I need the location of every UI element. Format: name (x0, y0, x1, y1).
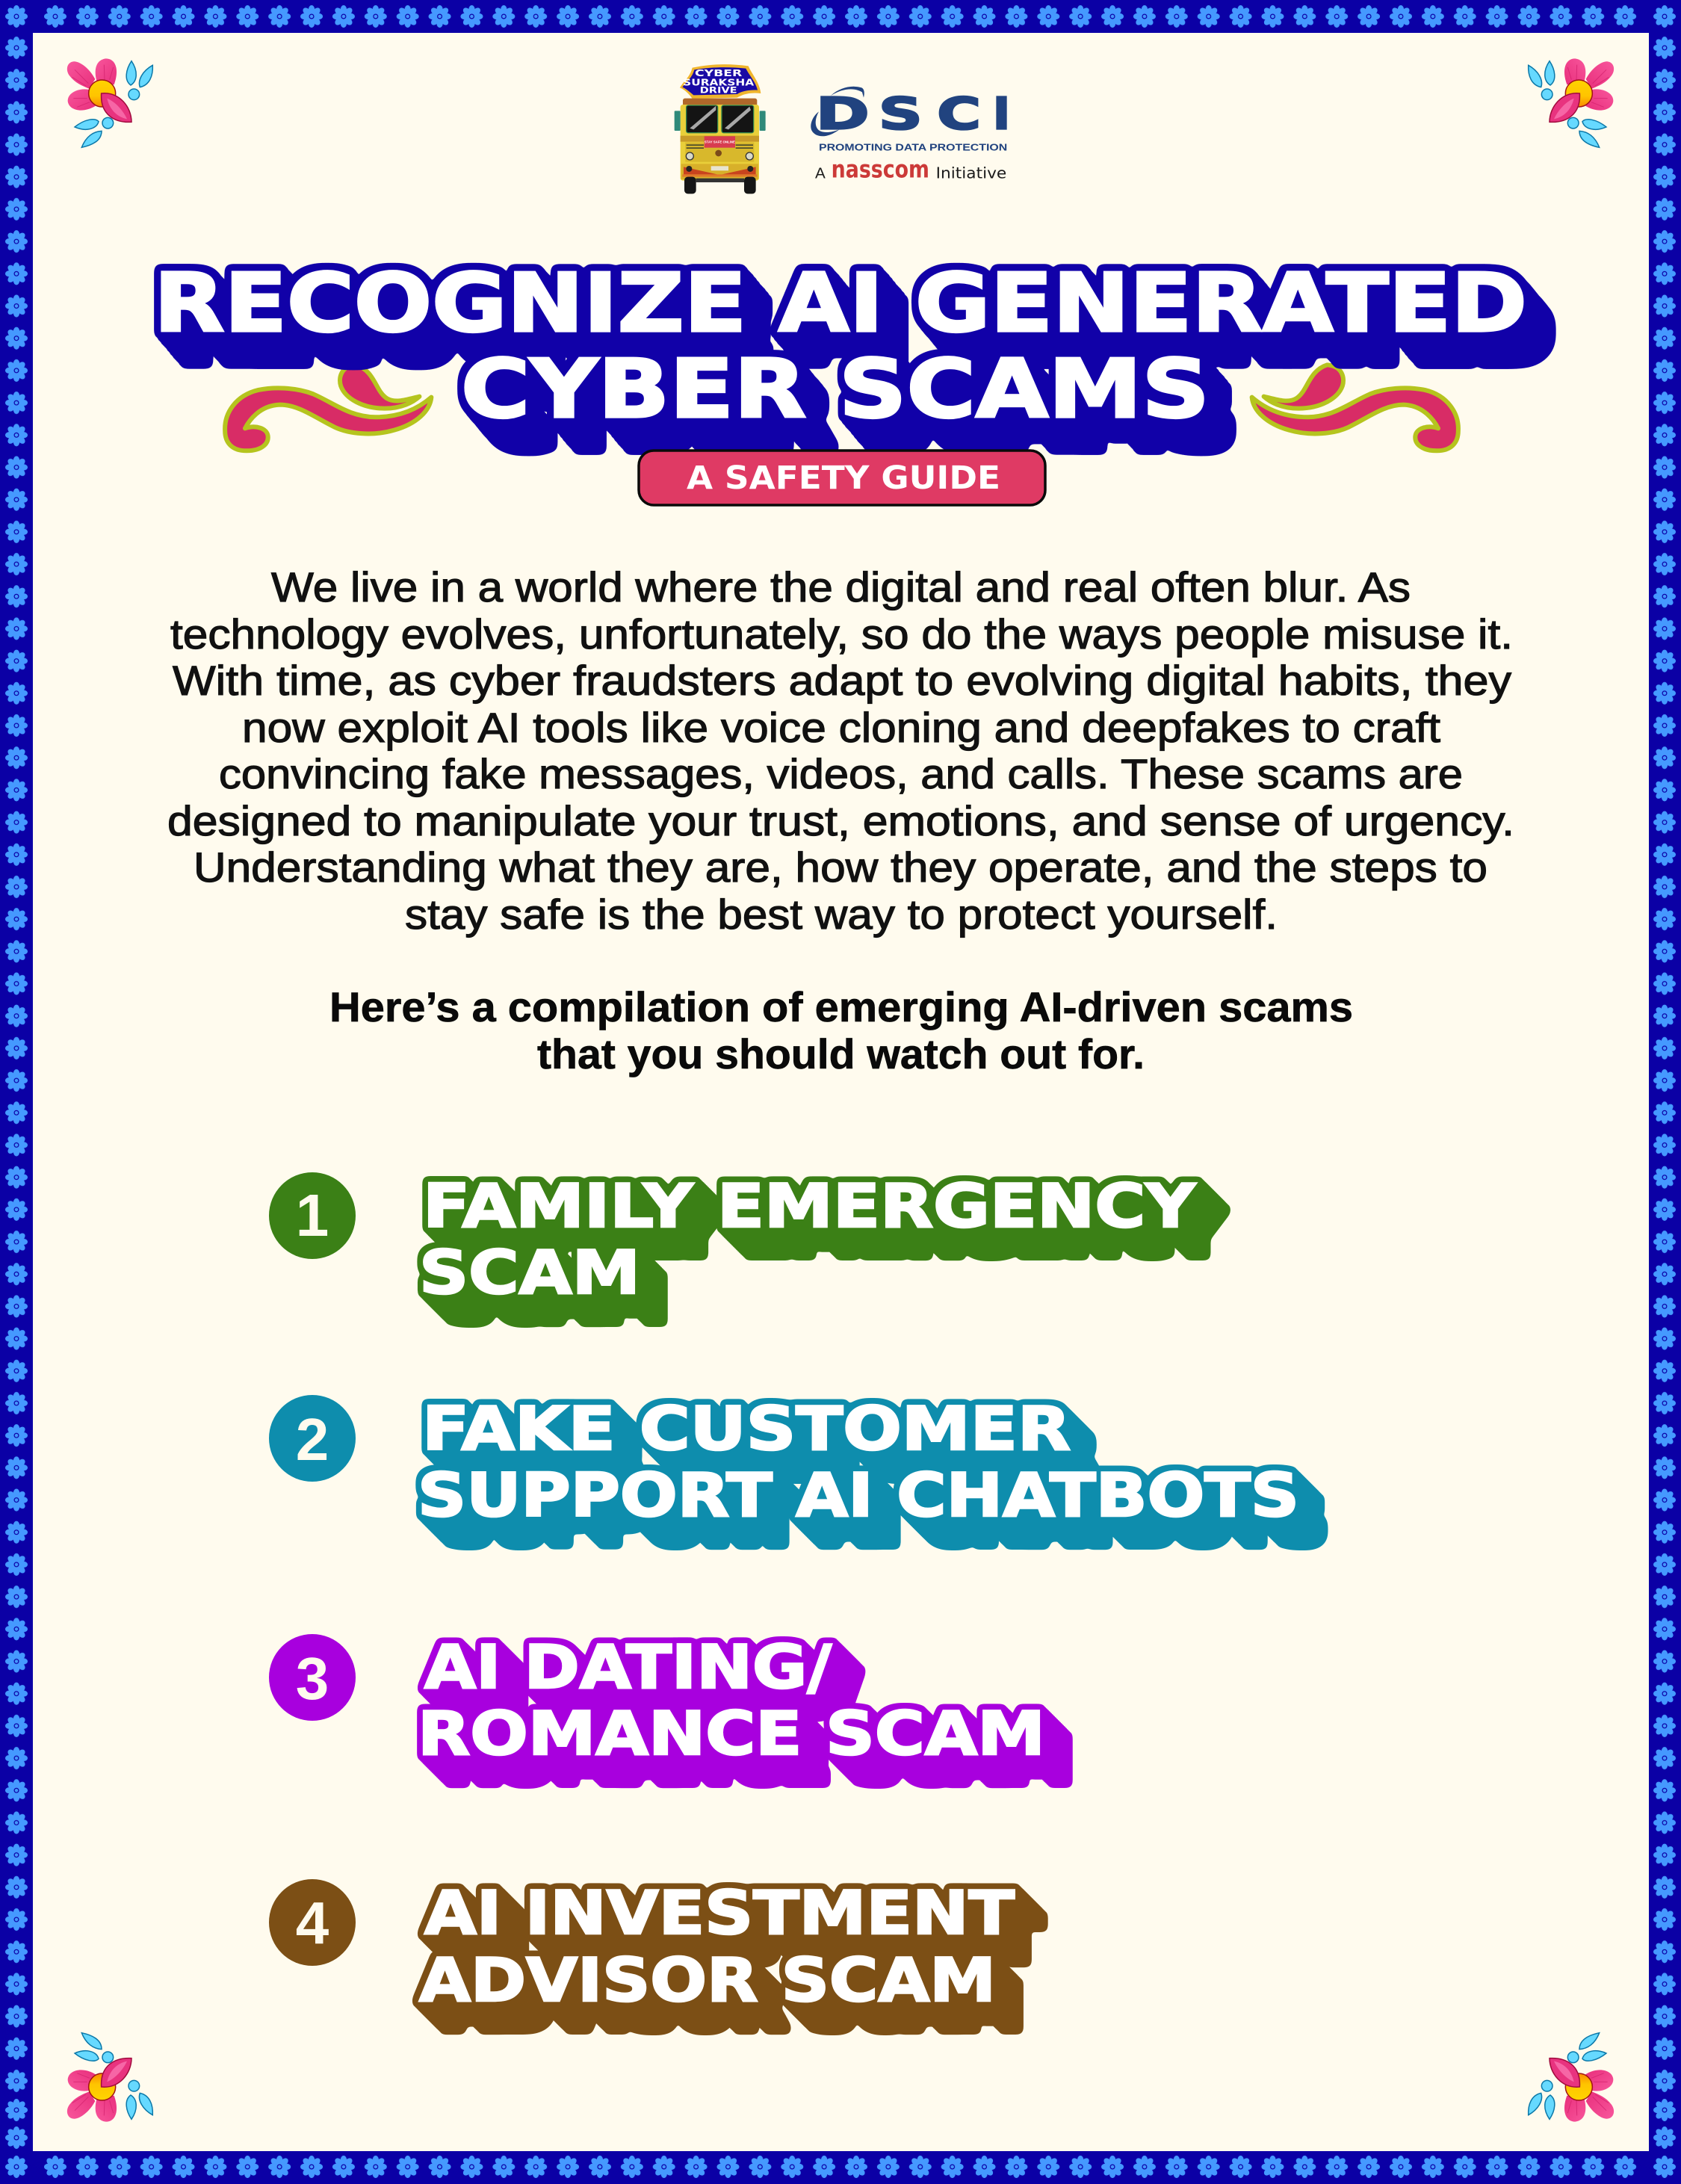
title: CYBER SCAMS (461, 343, 1210, 436)
bold lead-in text (329, 983, 1353, 1077)
logo: DSCI: nasscom (832, 155, 929, 184)
logo: Cyber Suraksha Drive truck: SURAKSHA (683, 78, 755, 88)
intro paragraph: now exploit AI tools like voice cloning and deepfakes to craft (242, 704, 1440, 751)
icon: paisley left (225, 365, 431, 451)
heading 2 (418, 1394, 1299, 1530)
logo: DSCI: PROMOTING DATA PROTECTION (819, 143, 1007, 153)
intro paragraph: technology evolves, unfortunately, so do the ways people misuse it. (170, 610, 1513, 658)
heading 4 (419, 1878, 1015, 2015)
heading 3 (418, 1633, 1045, 1769)
logo: DSCI (811, 87, 1010, 184)
title: RECOGNIZE AI GENERATED (154, 257, 1527, 350)
number badge 1 (269, 1172, 356, 1259)
logo: DSCI: A (815, 164, 826, 182)
intro paragraph: Understanding what they are, how they operate, and the steps to (194, 844, 1487, 891)
number badge 3: 3 (296, 1645, 329, 1712)
number badge 1: 1 (296, 1182, 329, 1249)
item 1: family emergency scam (269, 1172, 1196, 1308)
heading 4: ADVISOR SCAM (419, 1946, 996, 2015)
heading 1: SCAM (419, 1238, 640, 1308)
icon: corner flower top left (67, 58, 152, 147)
icon: corner flower bottom left (67, 2033, 152, 2122)
heading 3: AI DATING/ (424, 1633, 832, 1702)
heading 3: ROMANCE SCAM (418, 1699, 1045, 1769)
intro paragraph: We live in a world where the digital and real often blur. As (271, 563, 1411, 610)
intro paragraph: With time, as cyber fraudsters adapt to evolving digital habits, they (173, 657, 1511, 704)
icon: paisley right (1252, 365, 1458, 451)
number badge 4 (269, 1879, 356, 1966)
heading 2: FAKE CUSTOMER (422, 1394, 1071, 1464)
icon: corner flower top right (1529, 58, 1614, 147)
subtitle badge: A SAFETY GUIDE (687, 460, 1000, 497)
number badge 2: 2 (296, 1406, 329, 1473)
heading 2: SUPPORT AI CHATBOTS (418, 1461, 1299, 1530)
number badge 4: 4 (296, 1890, 329, 1956)
logo: DSCI: S (879, 88, 923, 139)
heading 1 (419, 1172, 1196, 1308)
logo: DSCI: C (937, 88, 981, 139)
logo: Cyber Suraksha Drive truck: STAY SAFE ONLINE (705, 140, 735, 144)
item 2: fake customer support AI chatbots (269, 1394, 1299, 1530)
heading 4: AI INVESTMENT (424, 1878, 1015, 1948)
bold lead-in text: that you should watch out for. (537, 1030, 1145, 1077)
item 3: AI dating/romance scam (269, 1633, 1045, 1769)
logo: Cyber Suraksha Drive truck: DRIVE (700, 85, 737, 96)
logo: Cyber Suraksha Drive truck (675, 64, 766, 194)
logo: Cyber Suraksha Drive truck: CYBER (695, 68, 742, 78)
number badge 2 (269, 1395, 356, 1482)
bold lead-in text: Here’s a compilation of emerging AI-driven scams (329, 983, 1353, 1030)
logo: DSCI: D (816, 88, 870, 139)
number badge 3 (269, 1634, 356, 1721)
heading 1: FAMILY EMERGENCY (423, 1172, 1196, 1241)
intro paragraph: stay safe is the best way to protect yourself. (405, 891, 1278, 938)
icon: corner flower bottom right (1529, 2033, 1614, 2122)
subtitle badge (639, 451, 1045, 505)
logo: DSCI: I (993, 88, 1010, 139)
title (154, 257, 1527, 436)
intro paragraph (167, 563, 1514, 938)
item 4: AI investment advisor scam (269, 1878, 1015, 2015)
intro paragraph: convincing fake messages, videos, and calls. These scams are (219, 750, 1463, 797)
intro paragraph: designed to manipulate your trust, emotions, and sense of urgency. (167, 797, 1514, 844)
logo: DSCI: Initiative (936, 164, 1006, 182)
